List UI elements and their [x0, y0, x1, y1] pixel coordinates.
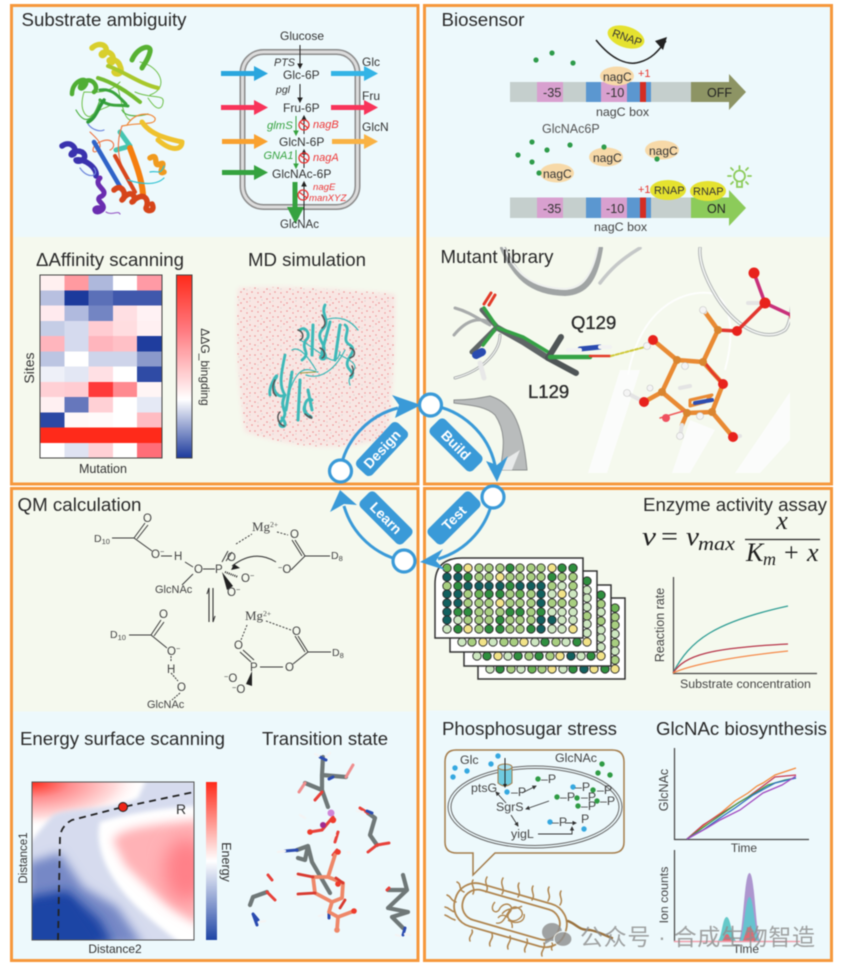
nagC repressor bound: [600, 66, 634, 86]
free nagC proteins: nagC: [543, 167, 572, 181]
cell labels: yigL: [511, 827, 534, 841]
arc: design: [340, 395, 421, 471]
transition state marker: [118, 802, 128, 812]
product state: D: [110, 629, 118, 641]
reaction rate chart: [653, 577, 817, 691]
pathway labels: GlcNAc: [280, 219, 319, 231]
equation: Michaelis-Menten: =: [661, 522, 678, 551]
reactant state: O: [227, 587, 236, 599]
colour bar: ΔΔG_bingding: [198, 328, 212, 406]
free nagC proteins: [536, 140, 679, 182]
pathway labels: GNA1: [264, 150, 293, 162]
promoter on state: [510, 180, 746, 234]
bacterium: [445, 877, 612, 956]
GlcNAc6P molecules: [515, 50, 576, 165]
heading: substrate ambiguity: Substrate ambiguity: [22, 10, 187, 30]
inhibition marks: [298, 120, 309, 200]
cell labels: –P: [575, 780, 590, 794]
icon: light bulb: [728, 166, 751, 187]
axis label: sites: Sites: [21, 352, 37, 384]
residue label L129: L129: [528, 381, 569, 402]
pale ribbons: [588, 370, 790, 473]
energy colour bar: Energy: [219, 842, 233, 883]
pathway labels: Glc-6P: [283, 68, 320, 82]
reactant state: H: [174, 551, 182, 563]
residue sticks L129 and Q129: [472, 293, 645, 378]
product state: O: [236, 684, 245, 696]
arc: learn: [330, 490, 404, 561]
reactant state: D: [94, 533, 102, 545]
equation: Michaelis-Menten: max: [698, 534, 736, 555]
label R: R: [176, 801, 186, 817]
vertical reaction arrows: [294, 45, 306, 220]
product state: P: [250, 662, 258, 674]
reactant state: −: [278, 563, 283, 572]
badge: learn: Learn: [367, 499, 405, 537]
promoter on state: ON: [707, 202, 726, 216]
promoter off state: [510, 66, 746, 119]
reactant state: P: [215, 564, 223, 576]
reaction mechanism: [94, 513, 344, 711]
plate 3: [464, 585, 611, 666]
product state: 2+: [263, 609, 271, 618]
reaction path: [58, 792, 194, 940]
axis label: time: Time: [731, 841, 757, 855]
cycle nodes: [330, 394, 504, 572]
GlcNAc production chart: [657, 748, 809, 855]
axis label: distance 1: Distance1: [18, 832, 30, 884]
plate 2: [450, 571, 597, 652]
promoter on state: -35: [543, 202, 561, 216]
product state: O: [167, 646, 176, 658]
cell labels: –P: [541, 772, 556, 786]
sugar dots: [450, 753, 587, 832]
product state: −: [224, 672, 229, 681]
pathway labels: GlcN-6P: [279, 135, 324, 149]
equation: Michaelis-Menten: +: [784, 538, 799, 567]
product state: H: [167, 664, 175, 676]
promoter on state: +1: [638, 184, 651, 196]
badge: learn: [357, 489, 415, 547]
label: GlcNAc6P: GlcNAc6P: [542, 122, 600, 136]
heading: biosensor: Biosensor: [442, 10, 525, 30]
reactant state: Mg: [252, 519, 270, 534]
product state: −: [232, 683, 237, 692]
badge: build: Build: [438, 427, 474, 463]
product state: O: [177, 682, 186, 694]
reactant state: GlcNAc: [155, 584, 193, 596]
icon: chat bubbles: [542, 923, 572, 946]
regulation arrows: [496, 786, 576, 834]
promoter off state: -35: [543, 86, 561, 100]
reactant state: O: [227, 552, 236, 564]
axis label: distance 2: Distance2: [88, 942, 142, 956]
product state: −: [176, 644, 181, 653]
badge: design: [354, 420, 410, 478]
pathway labels: Fru: [362, 89, 380, 103]
cell labels: –P: [511, 785, 526, 799]
axis label: substrate concentration: Substrate concentration: [680, 677, 811, 691]
panel: build: [424, 6, 832, 484]
promoter off state: nagC box: [596, 105, 650, 119]
cell labels: –P: [560, 790, 575, 804]
pathway labels: Fru-6P: [283, 101, 320, 115]
reactant state: D: [331, 550, 339, 562]
heatmap: [21, 275, 162, 476]
equilibrium arrows: [207, 588, 215, 622]
well plates: [435, 558, 625, 679]
arc: build: [430, 405, 508, 482]
DBTL cycle: [330, 394, 508, 572]
panel: test: [424, 488, 832, 960]
cell labels: –P: [581, 790, 596, 804]
product state: [110, 608, 344, 711]
cell envelope: [242, 52, 358, 207]
callout: phosphosugar cell: [445, 750, 624, 875]
equation: Michaelis-Menten: x: [806, 538, 819, 567]
cell labels: GlcNAc: [555, 751, 597, 765]
free nagC proteins: nagC: [593, 151, 622, 165]
promoter off state: nagC: [603, 70, 632, 84]
plate 4: [478, 598, 625, 679]
equation: Michaelis-Menten: K: [745, 538, 765, 567]
heading: md simulation: MD simulation: [248, 250, 366, 270]
cell labels: –P: [600, 794, 615, 808]
pathway labels: manXYZ: [309, 193, 347, 204]
nucleoid: [492, 902, 524, 928]
heading: phosphosugar stress: Phosphosugar stress: [442, 719, 617, 739]
cell labels: –P: [552, 815, 567, 829]
equation: Michaelis-Menten: x: [775, 506, 788, 535]
equation: Michaelis-Menten: v: [642, 522, 657, 551]
product state: O: [292, 626, 301, 638]
reactant state: 8: [339, 554, 343, 563]
heading: mutant library: Mutant library: [440, 247, 554, 267]
grey ribbons: [454, 246, 795, 378]
ion counts chart: [657, 850, 800, 956]
equation: Michaelis-Menten: v: [686, 522, 700, 551]
pathway diagram: [221, 29, 389, 231]
equation: Michaelis-Menten: m: [763, 549, 776, 569]
cell labels: SgrS: [496, 800, 524, 814]
pathway labels: nagA: [313, 152, 339, 164]
cell labels: [460, 751, 615, 841]
product state: O: [228, 673, 237, 685]
pathway labels: GlcNAc-6P: [272, 167, 331, 181]
watermark: 公众号 · 合成生物智造: [580, 924, 815, 950]
cell labels: P: [581, 812, 589, 826]
reactant state: O: [151, 549, 160, 561]
influx and efflux arrows: [221, 66, 378, 224]
badge: design: Design: [360, 426, 404, 472]
reactant state: −: [236, 585, 241, 594]
energy colour bar: [206, 782, 233, 940]
panel: learn: [12, 488, 418, 960]
pathway labels: Glucose: [280, 29, 324, 43]
ligand ball and stick: [624, 268, 800, 442]
cell labels: ptsG: [471, 781, 497, 795]
pathway labels: nagE: [313, 182, 336, 193]
RNAP passing with arrow: [596, 21, 667, 63]
equation: Michaelis-Menten: [642, 506, 820, 569]
cell membrane: [448, 766, 622, 848]
axis label: ion counts: Ion counts: [657, 867, 671, 923]
promoter on state: RNAP: [693, 186, 724, 198]
transporter: [498, 758, 512, 788]
pathway labels: GlcN: [362, 120, 389, 134]
product state: GlcNAc: [147, 699, 185, 711]
axis label: GlcNAc: GlcNAc: [657, 769, 671, 811]
pathway labels: nagB: [313, 119, 339, 131]
product state: D: [332, 647, 340, 659]
free nagC proteins: nagC: [649, 144, 678, 158]
pathway labels: glmS: [267, 120, 293, 132]
plate 1: [435, 558, 583, 638]
reactant state: O: [241, 573, 250, 585]
product state: O: [234, 640, 243, 652]
product state: O: [285, 662, 294, 674]
RNAP passing with arrow: RNAP: [610, 28, 643, 49]
energy surface map: [18, 780, 208, 956]
reactant state: 2+: [270, 520, 278, 529]
cell labels: Glc: [460, 753, 479, 767]
heading: QM calculation: QM calculation: [18, 495, 142, 515]
promoter off state: OFF: [707, 86, 732, 100]
promoter on state: RNAP: [654, 185, 685, 197]
reactant state: O: [194, 564, 203, 576]
reactant state: O: [290, 529, 299, 541]
pathway labels: pgl: [275, 84, 291, 96]
pathway labels: [264, 29, 389, 231]
flagellum: [568, 921, 612, 938]
heading: enzyme activity assay: Enzyme activity assay: [643, 495, 827, 515]
flagella hairs: [445, 877, 561, 956]
axis label: time: Time: [733, 942, 759, 956]
cell labels: –P: [597, 783, 612, 797]
product state: 10: [118, 633, 126, 642]
reactant state: [94, 513, 343, 599]
cell labels: –P: [581, 799, 596, 813]
arc: test: [420, 497, 493, 570]
reactant state: O: [143, 513, 152, 525]
panel: design: [12, 6, 418, 484]
md water box with protein: [237, 287, 395, 447]
product state: Mg: [245, 608, 263, 623]
reactant state: −: [160, 547, 165, 556]
product state: O: [159, 609, 168, 621]
residue label Q129: Q129: [571, 312, 616, 333]
badge: build: [427, 416, 485, 474]
colour bar: [176, 275, 212, 458]
promoter on state: nagC box: [594, 220, 648, 234]
pathway labels: Glc: [362, 55, 380, 69]
mutant library structure: [454, 246, 800, 473]
product state: 8: [340, 651, 344, 660]
axis label: mutation: Mutation: [79, 462, 127, 476]
promoter off state: +1: [638, 68, 651, 80]
reactant state: −: [250, 571, 255, 580]
transition state structure: [250, 753, 410, 936]
heading: energy surface scanning: Energy surface scanning: [20, 729, 225, 749]
promoter on state: -10: [606, 202, 624, 216]
pathway labels: PTS: [274, 57, 296, 69]
badge: test: Test: [439, 502, 470, 533]
heading: affinity scanning: ΔAffinity scanning: [36, 250, 184, 270]
reactant state: 10: [102, 537, 110, 546]
grey helix ribbon: [454, 396, 527, 470]
badge: test: [425, 489, 483, 547]
protein ribbon structure: [62, 45, 182, 214]
reactant state: O: [282, 564, 291, 576]
heading: transition state: Transition state: [262, 729, 388, 749]
axis label: reaction rate: Reaction rate: [653, 588, 667, 662]
heading: GlcNAc biosynthesis: GlcNAc biosynthesis: [656, 719, 827, 739]
promoter off state: -10: [606, 86, 624, 100]
